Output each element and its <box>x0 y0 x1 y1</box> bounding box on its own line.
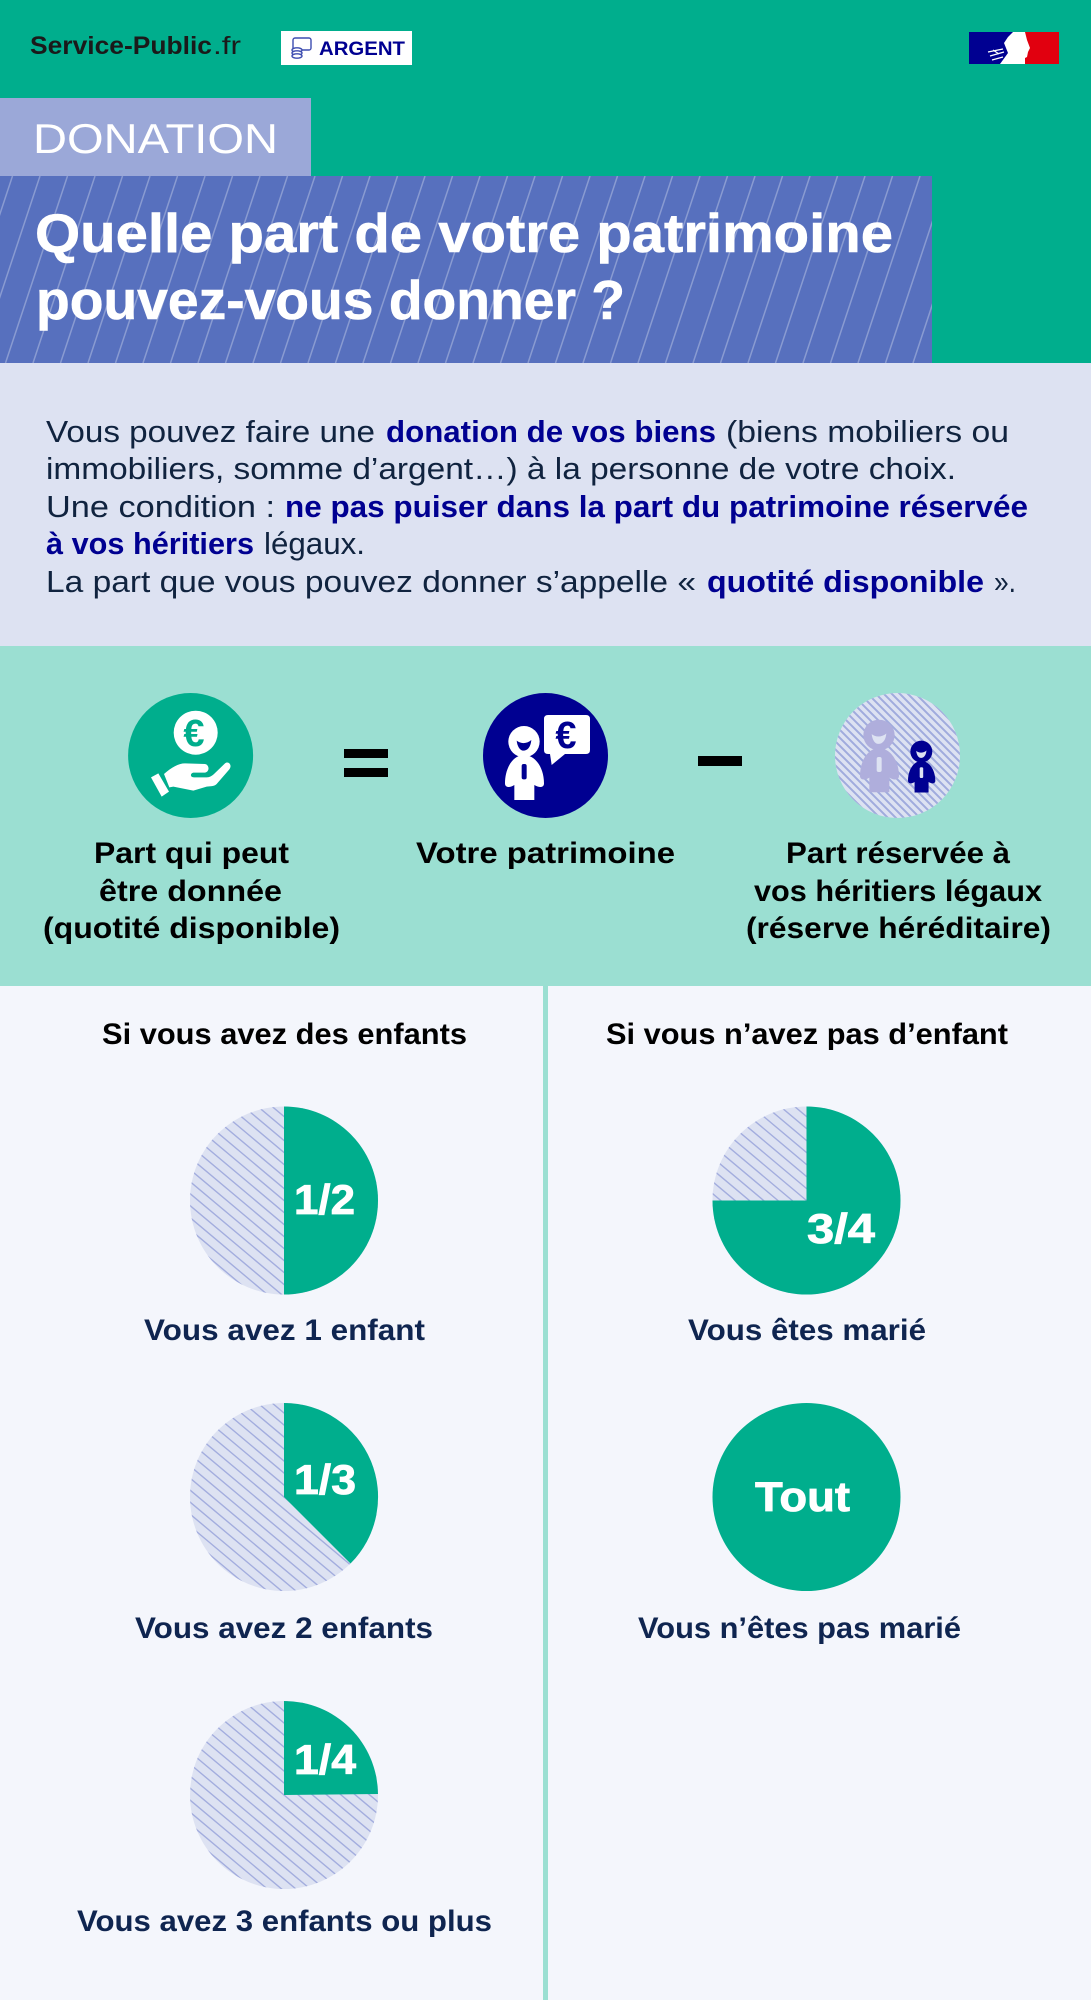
icon: banknote and coins <box>292 38 311 58</box>
label: 2 enfants: Vous avez 2 enfants <box>135 1612 433 1645</box>
equals sign <box>344 749 388 777</box>
title block <box>0 176 975 363</box>
text block: introduction: La part que vous pouvez donner s’appelle « <box>46 564 696 599</box>
pie chart: tout: Tout <box>755 1473 850 1520</box>
icon: adult and child hatched <box>835 693 960 818</box>
text block: introduction: Une condition : <box>46 489 275 524</box>
label: part réservée: (réserve héréditaire) <box>746 912 1051 945</box>
text block: introduction: immobiliers, somme d’argent…) à la personne de votre choix. <box>46 451 956 486</box>
label: part qui peut être donnée: (quotité disponible) <box>43 912 340 945</box>
label: 3 enfants ou plus: Vous avez 3 enfants ou plus <box>77 1905 492 1938</box>
text block: introduction: quotité disponible <box>707 564 984 599</box>
label: part qui peut être donnée: être donnée <box>99 875 282 908</box>
label: votre patrimoine: Votre patrimoine <box>416 837 675 870</box>
heading: right column: Si vous n’avez pas d’enfant <box>606 1018 1008 1051</box>
icon: person with euro speech bubble <box>483 693 608 818</box>
pie chart: 1/2 <box>190 1106 378 1294</box>
logo: République française flag <box>969 32 1059 64</box>
panel: introduction <box>0 363 1091 646</box>
tag: DONATION: DONATION <box>33 115 278 162</box>
logo: Service-Public.fr: Service-Public <box>30 32 212 60</box>
text block: introduction: Vous pouvez faire une <box>46 414 375 449</box>
minus sign <box>698 756 742 766</box>
pie chart: 1/3 <box>190 1403 378 1591</box>
label: part réservée <box>746 837 1051 945</box>
label: 1 enfant: Vous avez 1 enfant <box>144 1314 425 1347</box>
tag: DONATION <box>0 98 311 176</box>
badge: ARGENT <box>281 31 412 65</box>
panel: green header <box>0 0 1091 363</box>
panel: si vous avez des enfants <box>77 996 492 1999</box>
panel: lower background and column divider <box>0 986 1091 2000</box>
pie chart: 3/4: 3/4 <box>807 1205 876 1252</box>
text block: introduction: donation de vos biens <box>386 414 716 449</box>
icon: hand holding euro coin: € <box>183 713 205 755</box>
label: part réservée: vos héritiers légaux <box>754 875 1042 908</box>
label: pas marié: Vous n’êtes pas marié <box>638 1612 961 1645</box>
label: marié: Vous êtes marié <box>688 1314 926 1347</box>
pie chart: 1/3: 1/3 <box>294 1456 356 1503</box>
title <box>35 202 893 331</box>
pie chart: 3/4 <box>712 1106 900 1294</box>
label: part qui peut être donnée <box>43 837 340 945</box>
pie chart: 1/4: 1/4 <box>294 1736 357 1783</box>
pie chart: 1/2: 1/2 <box>294 1176 355 1223</box>
text block: introduction: ne pas puiser dans la part du patrimoine réservée <box>285 489 1028 524</box>
text block: introduction: légaux. <box>264 526 365 561</box>
text block: introduction: (biens mobiliers ou <box>726 414 1009 449</box>
text block: introduction <box>46 414 1028 599</box>
text block: introduction: à vos héritiers <box>46 526 254 561</box>
label: part qui peut être donnée: Part qui peut <box>94 837 289 870</box>
title: Quelle part de votre patrimoine <box>35 202 893 264</box>
text block: introduction: ». <box>994 564 1016 599</box>
pie chart: tout <box>712 1403 900 1591</box>
pie chart: 1/4 <box>190 1701 378 1889</box>
panel: formula <box>0 646 1091 986</box>
icon: person with euro speech bubble: € <box>555 715 577 757</box>
label: part réservée: Part réservée à <box>786 837 1010 870</box>
title: pouvez-vous donner ? <box>36 269 625 331</box>
heading: left column: Si vous avez des enfants <box>102 1018 467 1051</box>
badge: ARGENT: ARGENT <box>319 38 405 60</box>
panel: si vous n'avez pas d'enfant <box>606 996 1008 1645</box>
icon: hand holding euro coin <box>128 693 253 818</box>
logo: Service-Public.fr: .fr <box>213 32 241 60</box>
